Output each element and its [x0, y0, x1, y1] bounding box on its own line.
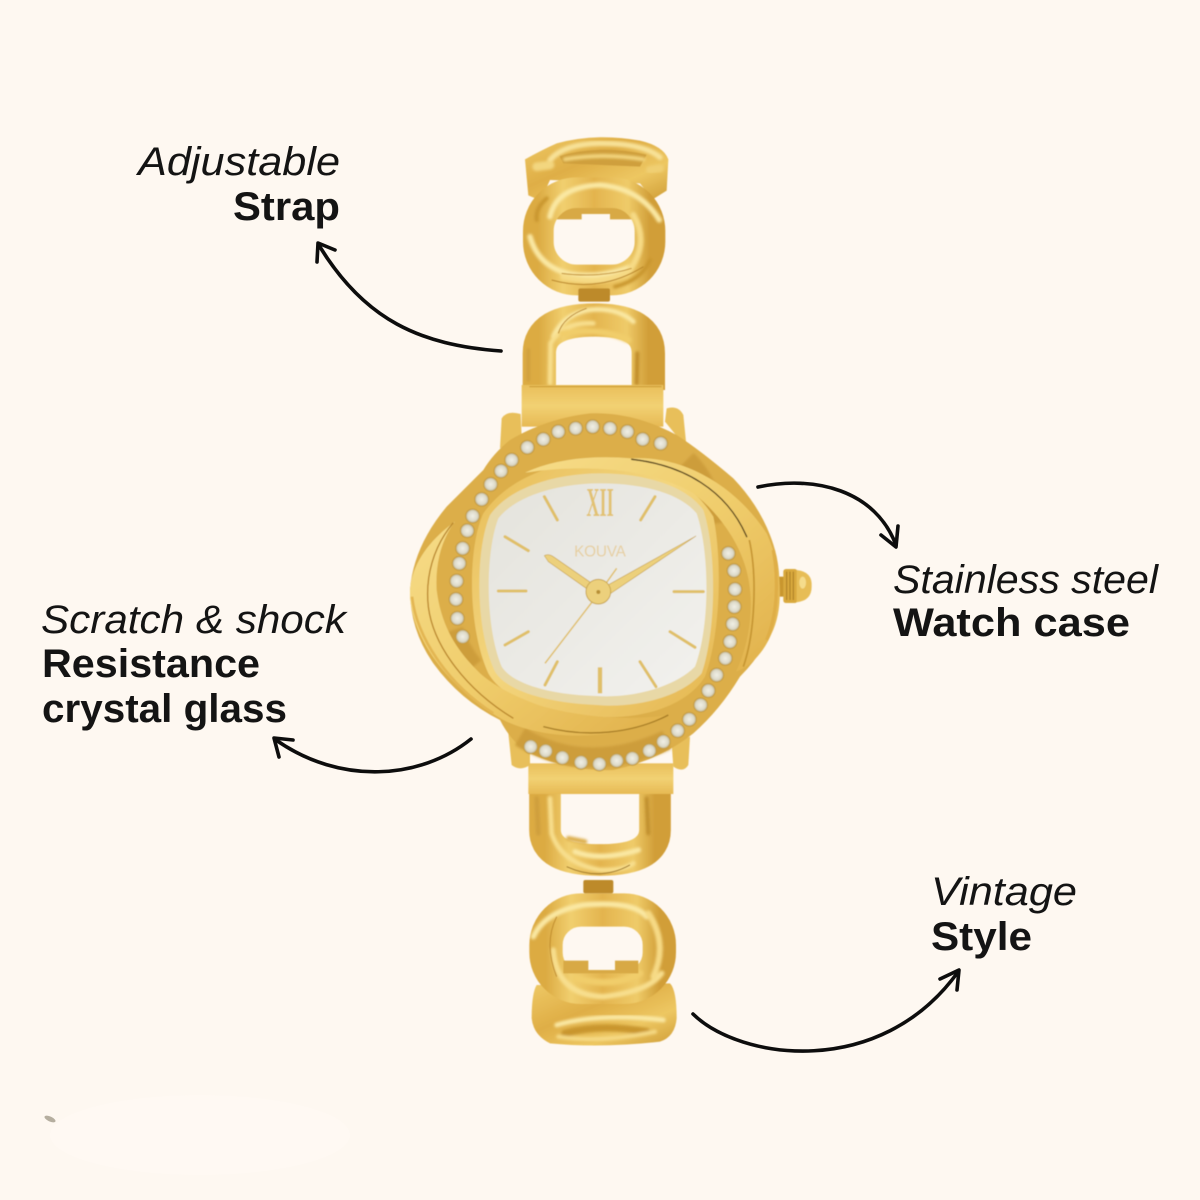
case silhouette	[410, 413, 780, 770]
clasp inside lower link	[563, 961, 638, 973]
label: vintage style	[931, 870, 1077, 959]
upper bracelet	[522, 137, 668, 427]
strap block	[522, 385, 663, 427]
label: scratch and shock resistance: Resistance	[42, 642, 260, 686]
lower end piece	[532, 983, 677, 1045]
lugs	[500, 407, 690, 770]
watch case: XII	[586, 479, 614, 525]
dial bezel	[479, 473, 713, 706]
lower strap block	[528, 763, 673, 794]
label: vintage style: Style	[931, 915, 1032, 959]
connector pin	[583, 880, 613, 893]
arrow: to watch case label	[758, 483, 898, 547]
label: vintage style: Vintage	[931, 870, 1077, 914]
polished top and right band	[525, 457, 780, 672]
lower padlock link	[537, 790, 655, 874]
clasp behind link	[557, 207, 633, 219]
connector pin	[578, 288, 610, 302]
faint smudge	[44, 1095, 350, 1175]
dial face	[489, 483, 706, 696]
brand name: KOUVA	[574, 544, 627, 561]
crystals	[449, 420, 742, 771]
arrow: to vintage style label	[693, 970, 959, 1051]
watch hands	[544, 536, 696, 663]
crystal channel shading	[453, 460, 717, 758]
hour markers	[498, 497, 703, 693]
watch	[410, 137, 812, 1045]
label: scratch and shock resistance	[41, 598, 348, 731]
dial frame band	[472, 462, 719, 717]
label: stainless steel watch case: Watch case	[893, 601, 1130, 645]
padlock link	[528, 308, 648, 390]
polished left and bottom band	[410, 522, 668, 736]
label: adjustable strap: Strap	[233, 185, 340, 229]
twisted round link	[530, 185, 659, 287]
crown	[777, 569, 812, 603]
label: stainless steel watch case	[893, 558, 1159, 645]
lower round link	[533, 904, 662, 997]
label: scratch and shock resistance: crystal glass	[42, 687, 287, 731]
label: adjustable strap: Adjustable	[136, 140, 340, 184]
label: adjustable strap	[136, 140, 340, 229]
label: stainless steel watch case: Stainless steel	[893, 558, 1159, 602]
arrow: to strap	[317, 243, 501, 351]
watch case	[410, 407, 812, 771]
strap end piece	[525, 137, 668, 201]
arrow: to crystal glass label	[274, 738, 471, 772]
label: scratch and shock resistance: Scratch & shock	[41, 598, 348, 642]
lower bracelet	[528, 763, 677, 1045]
